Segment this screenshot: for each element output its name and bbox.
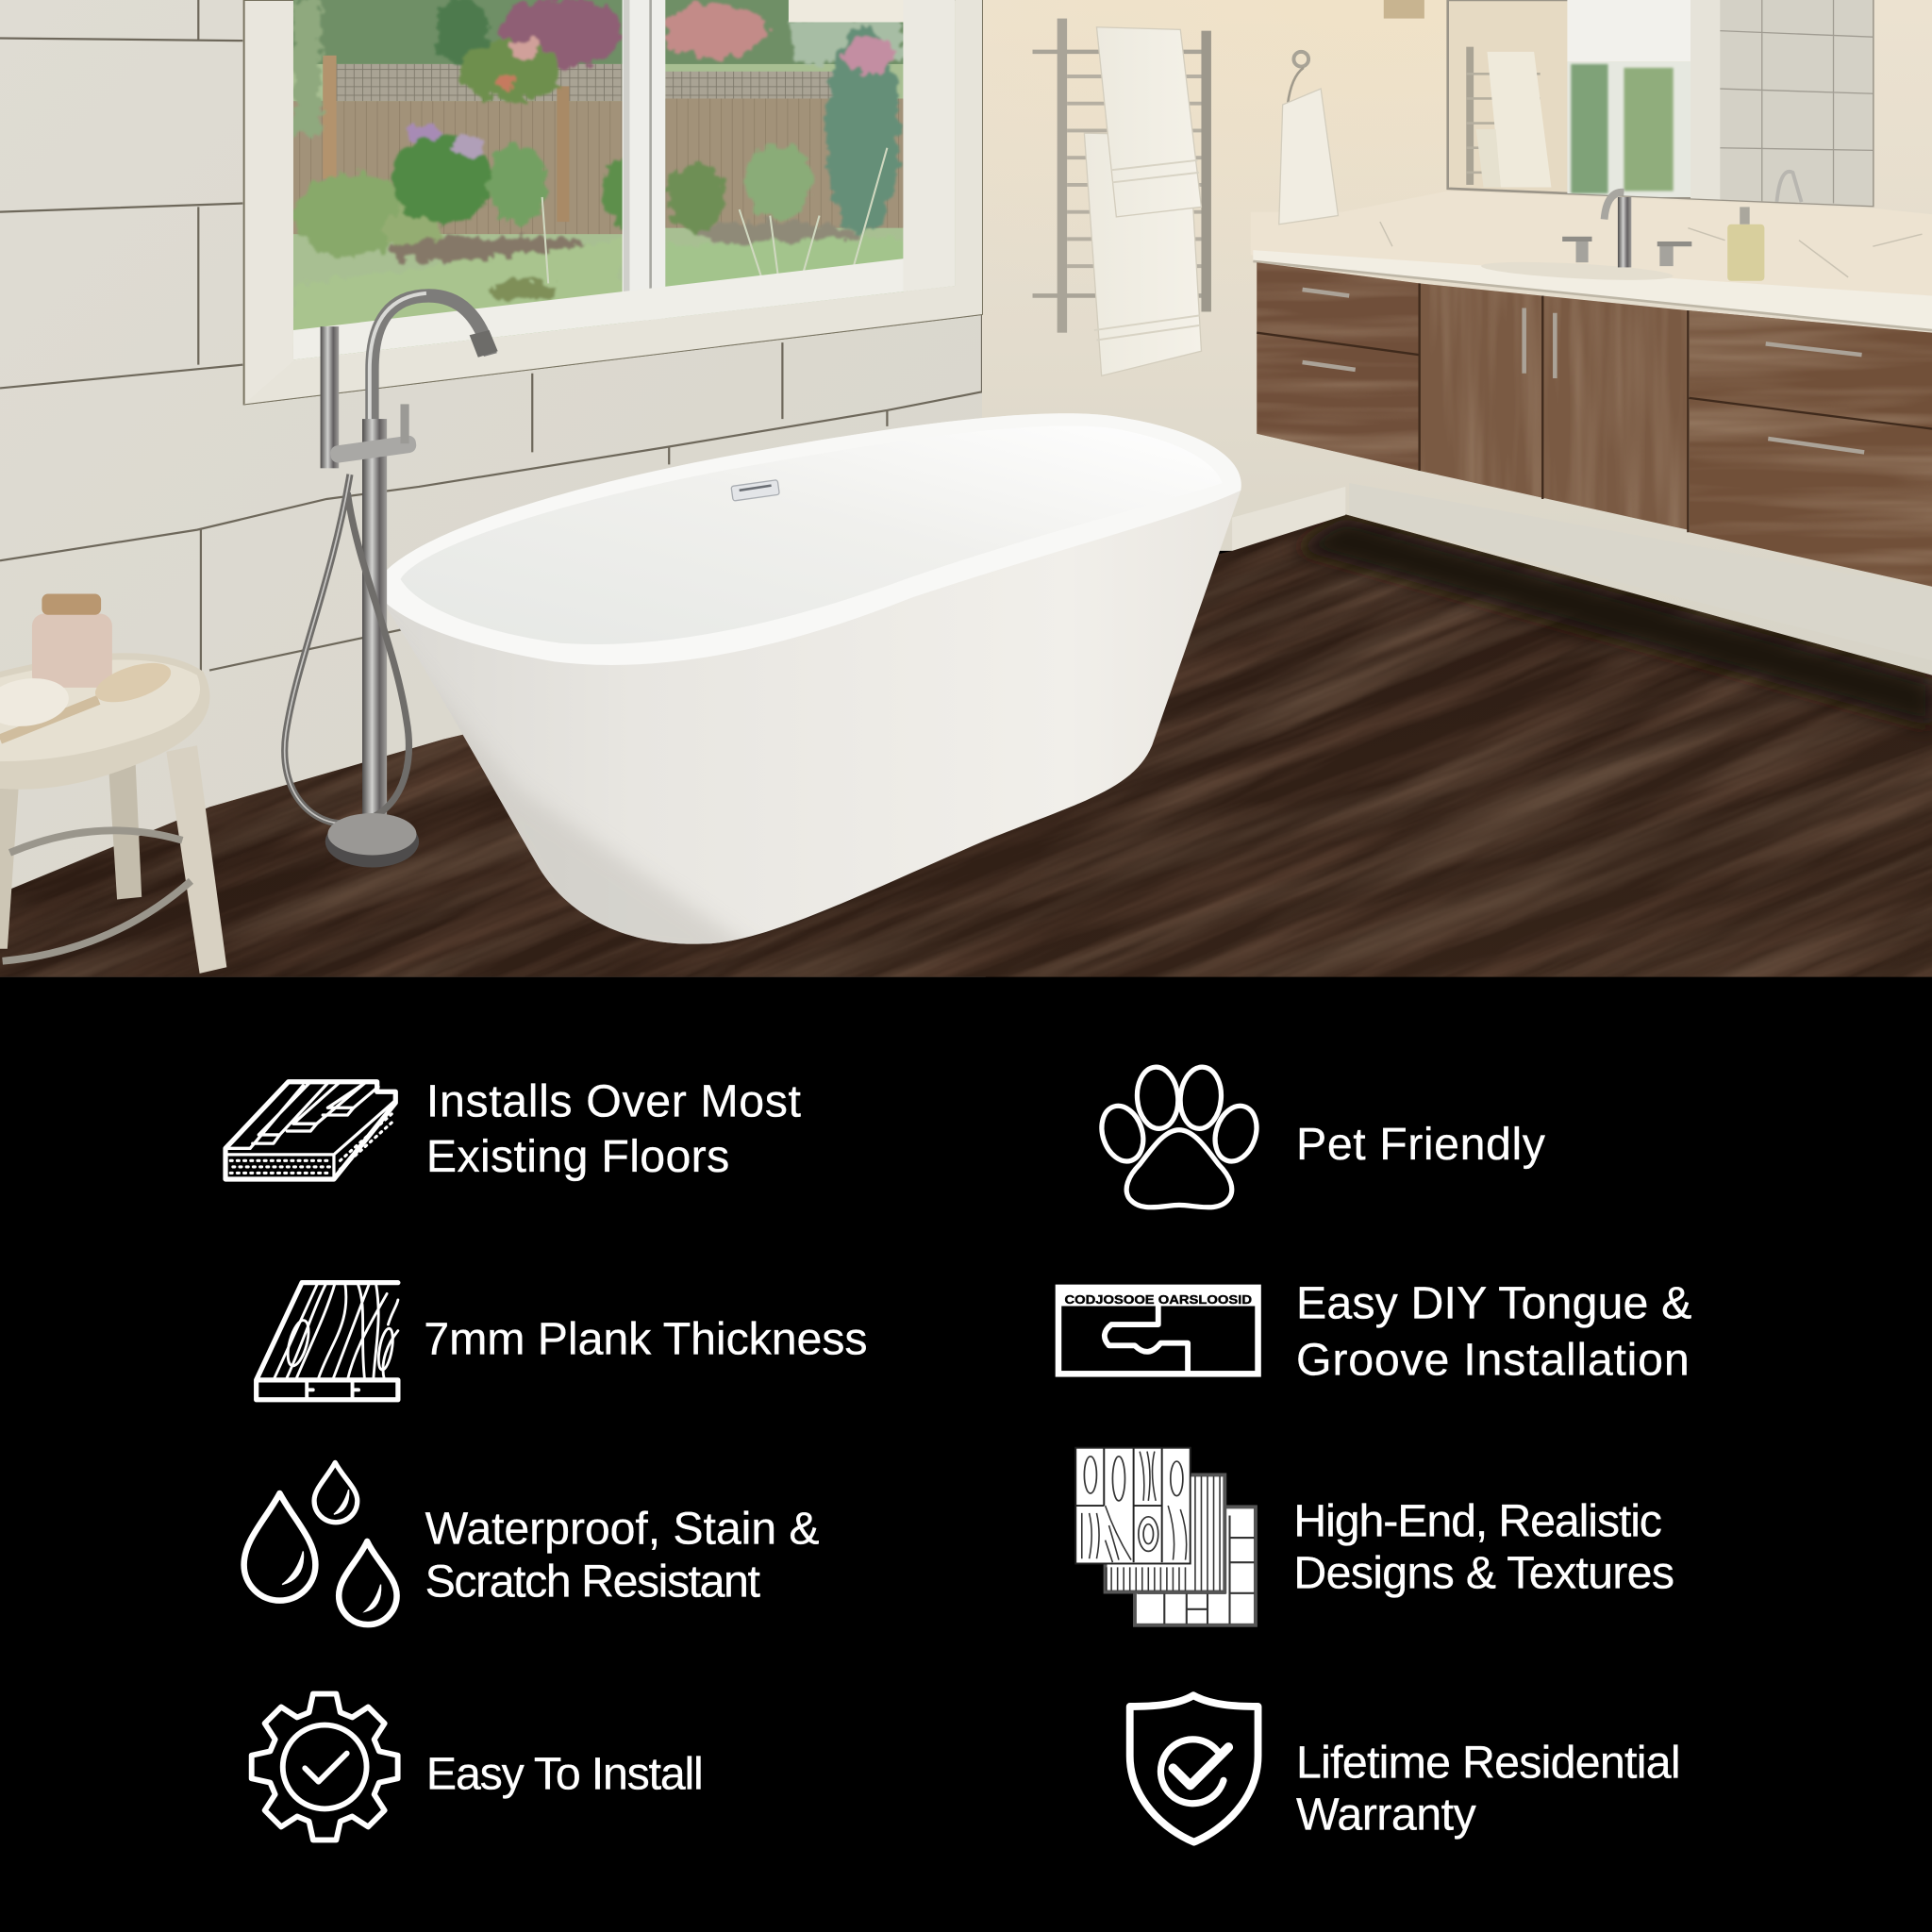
window frame: [244, 0, 982, 404]
feature: easy to install: [252, 1694, 704, 1840]
photo: bathroom with freestanding tub: [0, 0, 1932, 977]
marble veining: [1380, 222, 1923, 277]
window center mullion: [623, 0, 665, 321]
window with garden view: [293, 0, 961, 370]
wall base under vanity: [1349, 483, 1932, 660]
text: high-end realistic designs and textures: Designs & Textures: [1293, 1548, 1674, 1599]
heated towel rack: [1033, 19, 1211, 333]
text: 7mm plank thickness: 7mm Plank Thickness: [424, 1313, 868, 1364]
icon: wood plank: [257, 1283, 398, 1400]
wood floor: [0, 514, 1932, 977]
text: installs over most existing floors: Installs Over Most: [426, 1075, 802, 1126]
text: high-end realistic designs and textures: High-End, Realistic: [1293, 1496, 1662, 1547]
freestanding bathtub: [370, 413, 1241, 974]
garden stems: [542, 148, 887, 283]
text: installs over most existing floors: Existing Floors: [426, 1131, 729, 1182]
mirror: [1448, 0, 1873, 209]
feature: easy DIY tongue and groove installation: [1058, 1278, 1691, 1386]
text: easy DIY tongue and groove installation: Groove Installation: [1296, 1335, 1690, 1386]
vanity cabinet: [1257, 262, 1932, 587]
window shade: [789, 0, 961, 23]
window sill: [293, 253, 955, 363]
feature: lifetime residential warranty: [1130, 1695, 1681, 1842]
stool: [0, 653, 226, 974]
text: waterproof, stain and scratch resistant: Waterproof, Stain &: [425, 1504, 820, 1555]
tiled wall left: [0, 0, 986, 977]
cream wall right: [982, 0, 1932, 690]
floor-mounted tub filler faucet: [285, 293, 498, 868]
soap dispenser: [1727, 207, 1764, 281]
icon: stacked texture samples: [1075, 1448, 1256, 1625]
icon: shield with check: [1130, 1695, 1258, 1842]
sconce: [1384, 0, 1424, 19]
vanity faucet and handles: [1562, 192, 1691, 267]
fence: [293, 0, 909, 234]
baseboard: [1232, 487, 1345, 551]
icon: gear with check: [252, 1694, 398, 1840]
window reveal: [903, 0, 958, 295]
text: lifetime residential warranty: Lifetime Residential: [1296, 1738, 1681, 1789]
backsplash: [1251, 191, 1932, 295]
jar of bath salt: [32, 594, 112, 688]
icon: floor layers: [225, 1082, 395, 1179]
icon: water drops: [244, 1462, 397, 1624]
icon: tongue and groove profile: [1058, 1288, 1258, 1374]
icon: tongue and groove profile: CODJOSOOE OARSLOOSID: [1064, 1292, 1252, 1307]
feature: waterproof, stain and scratch resistant: [244, 1462, 820, 1624]
black panel background: [0, 977, 1932, 1932]
text: easy to install: Easy To Install: [426, 1748, 704, 1799]
feature: pet friendly: [1095, 1065, 1546, 1208]
countertop: [1253, 250, 1932, 330]
feature: installs over most existing floors: [225, 1075, 802, 1182]
text: lifetime residential warranty: Warranty: [1296, 1790, 1477, 1840]
feature panel: [0, 977, 1932, 1932]
hand towel on ring: [1279, 52, 1338, 225]
feature: 7mm plank thickness: [257, 1283, 868, 1400]
hanging towels: [1084, 27, 1201, 375]
icon: paw print: [1095, 1065, 1263, 1208]
text: pet friendly: Pet Friendly: [1296, 1119, 1546, 1170]
foliage and lawn: [293, 0, 906, 370]
feature: high-end realistic designs and textures: [1075, 1448, 1674, 1625]
text: easy DIY tongue and groove installation: Easy DIY Tongue &: [1296, 1278, 1691, 1329]
bath brush: [0, 656, 175, 740]
text: waterproof, stain and scratch resistant: Scratch Resistant: [425, 1557, 760, 1607]
